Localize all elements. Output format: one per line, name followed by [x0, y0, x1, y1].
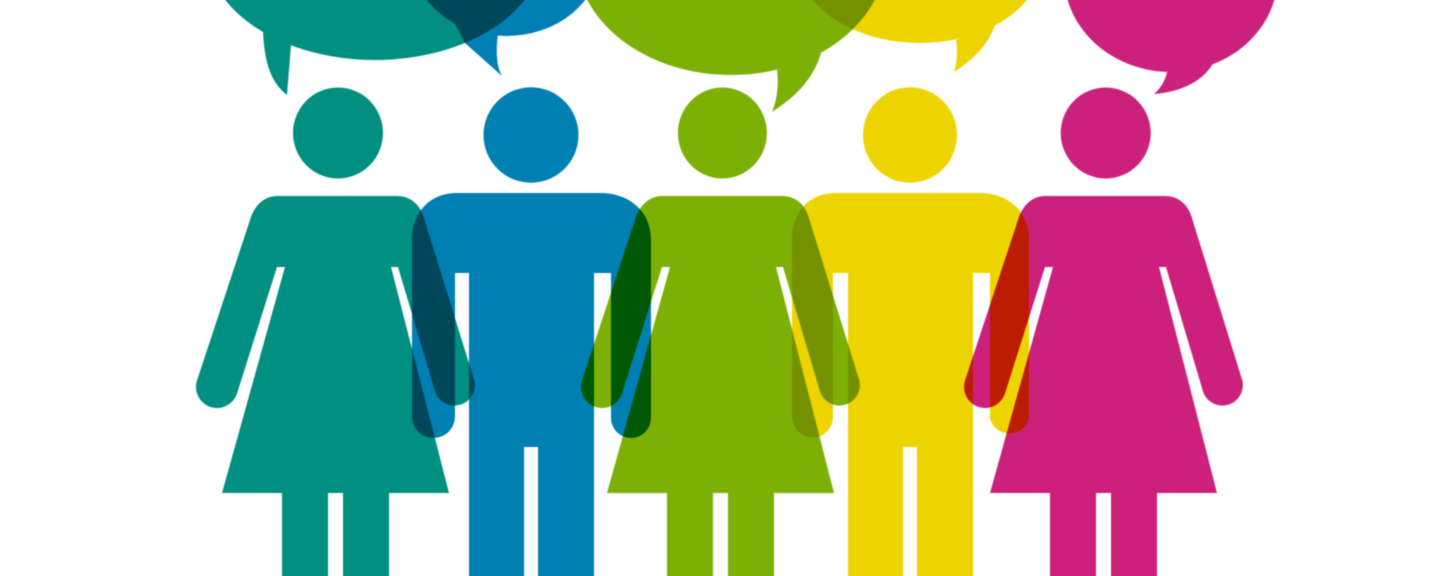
figure: green woman — [581, 88, 860, 576]
figure: magenta woman — [964, 88, 1243, 576]
figure: blue man — [412, 87, 651, 576]
speech bubble: magenta — [1064, 0, 1278, 94]
figure: teal woman — [196, 88, 475, 576]
speech bubble: teal — [207, 0, 543, 95]
speech bubble: blue — [413, 0, 599, 76]
figure: yellow man — [792, 87, 1029, 576]
speech bubble: yellow — [798, 0, 1042, 72]
speech bubble: green — [576, 0, 886, 112]
